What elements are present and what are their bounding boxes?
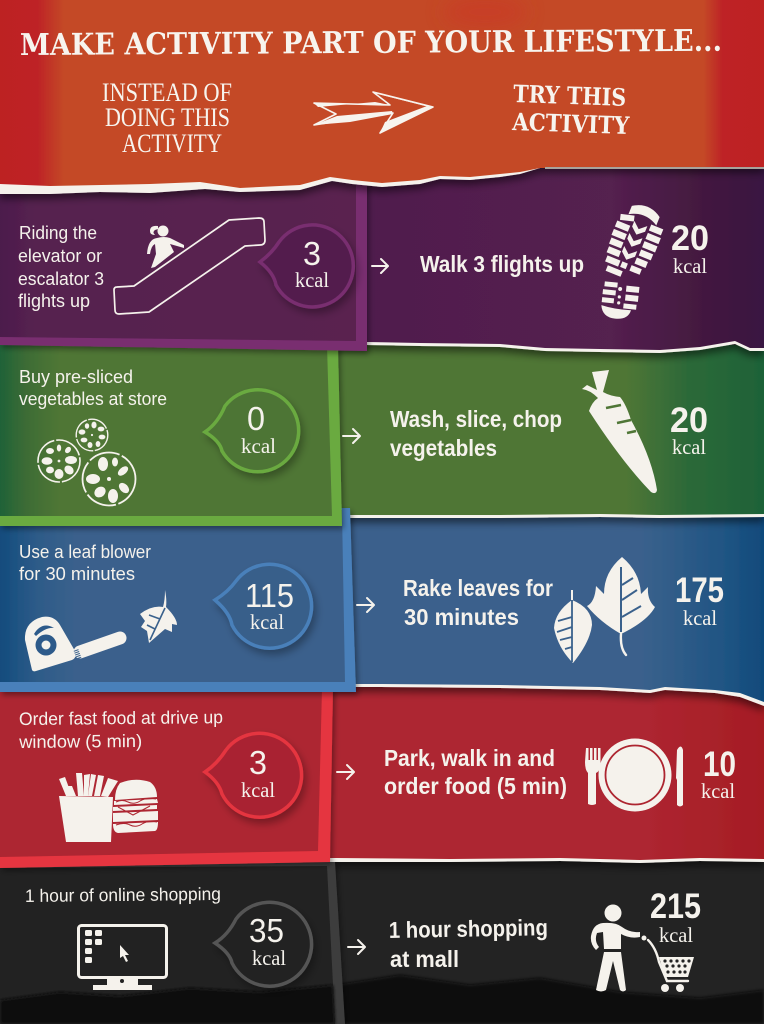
icon: falling leaf xyxy=(140,590,177,643)
arrow: row 1 xyxy=(372,259,388,273)
row 4 text: park xyxy=(384,745,567,799)
arrow: row 3 xyxy=(357,598,374,612)
row 1 text: elevator: escalator 3 xyxy=(18,269,104,289)
value: 0 kcal xyxy=(241,400,276,458)
row 1 text: elevator: Riding the xyxy=(19,223,97,243)
bubble: 3 kcal escalator xyxy=(260,225,353,307)
row 1 text: elevator: flights up xyxy=(18,291,90,311)
row 5 text: mall: at mall xyxy=(390,946,459,972)
row 5 text: mall xyxy=(389,914,548,972)
panel: online shopping xyxy=(0,862,345,1024)
row 5 text: online shopping: 1 hour of online shopping xyxy=(25,884,221,906)
value: 175 kcal: 175 xyxy=(675,571,724,610)
value: 0 kcal: 0 xyxy=(247,400,265,437)
row 4 text: park: order food (5 min) xyxy=(384,773,567,799)
row 4 text: fast food: window (5 min) xyxy=(18,731,142,752)
value: 115 kcal: 115 xyxy=(245,577,294,614)
panel: elevator xyxy=(0,182,367,351)
label: instead of doing this activity xyxy=(102,78,232,158)
row 1 text: walk: Walk 3 flights up xyxy=(420,251,584,277)
row 3 text: rake: Rake leaves for xyxy=(403,575,553,601)
row 2 text: pre-sliced: Buy pre-sliced xyxy=(19,367,133,387)
value: 20 kcal chop: kcal xyxy=(672,435,706,459)
row 2 text: pre-sliced: vegetables at store xyxy=(19,389,167,409)
band: black base xyxy=(0,850,764,1024)
label: instead of doing this activity: ACTIVITY xyxy=(122,129,222,158)
row 3 text: leaf blower: Use a leaf blower xyxy=(19,542,151,562)
icon: boot print xyxy=(598,198,670,321)
value: 3 kcal: 3 xyxy=(303,235,321,272)
row 3 text: leaf blower xyxy=(19,542,151,584)
value: 115 kcal xyxy=(245,577,294,634)
value: 10 kcal xyxy=(701,745,736,803)
label: try this activity: ACTIVITY xyxy=(511,107,630,140)
row 4 text: fast food xyxy=(18,707,223,752)
icon: two leaves xyxy=(554,557,655,663)
label: try this activity: TRY THIS xyxy=(513,79,627,112)
arrow: row 4 xyxy=(337,765,354,779)
band: green right side xyxy=(0,345,764,518)
band: red right side xyxy=(0,680,764,863)
value: 0 kcal: kcal xyxy=(241,434,276,458)
value: 20 kcal walk xyxy=(671,219,709,278)
label: instead of doing this activity: DOING THIS xyxy=(105,103,230,132)
label: try this activity xyxy=(511,79,630,140)
icon: fork plate knife xyxy=(585,738,683,812)
value: 3 kcal xyxy=(295,235,329,292)
value: 175 kcal xyxy=(675,571,724,630)
icon: escalator with girl xyxy=(114,218,265,314)
icon: leaf blower xyxy=(25,617,120,671)
panel: fast food xyxy=(0,688,333,868)
value: 10 kcal: 10 xyxy=(703,745,736,784)
row 2 text: wash: Wash, slice, chop xyxy=(390,406,562,432)
arrow: header xyxy=(314,92,433,133)
bubble: 35 kcal xyxy=(215,902,312,986)
value: 215 kcal: 215 xyxy=(650,887,701,926)
value: 3 kcal drive up xyxy=(241,744,275,802)
icon: lotus root slices xyxy=(38,419,136,506)
icon: shopper with cart xyxy=(591,904,694,992)
label: instead of doing this activity: INSTEAD OF xyxy=(102,78,232,107)
row 4 text: park: Park, walk in and xyxy=(384,745,555,771)
header banner xyxy=(0,0,764,194)
panel: leaf blower xyxy=(0,508,356,692)
value: 35 kcal: 35 xyxy=(249,912,284,949)
bubble: 115 kcal xyxy=(215,564,312,648)
arrow: row 5 xyxy=(348,940,365,954)
icon: computer monitor xyxy=(78,926,166,990)
value: 3 kcal: kcal xyxy=(295,268,329,292)
band: purple right side xyxy=(0,165,764,353)
row 4 text: fast food: Order fast food at drive up xyxy=(19,707,223,729)
value: 10 kcal: kcal xyxy=(701,779,735,803)
row 3 text: rake: 30 minutes xyxy=(404,604,519,630)
value: 20 kcal chop xyxy=(670,401,708,459)
row 1 text: elevator: elevator or xyxy=(18,246,102,266)
row 3 text: leaf blower: for 30 minutes xyxy=(19,564,135,584)
value: 175 kcal: kcal xyxy=(683,606,717,630)
value: 215 kcal xyxy=(650,887,701,947)
bubble: 3 kcal fast food xyxy=(205,733,302,817)
value: 115 kcal: kcal xyxy=(250,610,284,634)
value: 3 kcal drive up: 3 xyxy=(249,744,267,781)
row 2 text: wash: vegetables xyxy=(390,435,497,461)
row 3 text: rake xyxy=(403,575,553,630)
icon: fries and burger xyxy=(59,773,158,842)
row 1 text: elevator xyxy=(18,223,104,311)
icon: carrot xyxy=(582,370,657,493)
band: blue right side xyxy=(0,510,764,706)
bubble: 0 kcal vegetables xyxy=(205,390,299,472)
value: 3 kcal drive up: kcal xyxy=(241,778,275,802)
row 2 text: wash xyxy=(390,406,562,461)
value: 35 kcal: kcal xyxy=(252,946,286,970)
value: 20 kcal chop: 20 xyxy=(670,401,708,440)
value: 20 kcal walk: 20 xyxy=(671,219,709,258)
value: 35 kcal xyxy=(249,912,286,970)
panel: pre-sliced vegetables xyxy=(0,345,342,526)
arrow: row 2 xyxy=(343,429,360,443)
row 5 text: mall: 1 hour shopping xyxy=(389,914,548,943)
row 2 text: pre-sliced xyxy=(19,367,167,409)
value: 215 kcal: kcal xyxy=(659,923,693,947)
value: 20 kcal walk: kcal xyxy=(673,254,707,278)
